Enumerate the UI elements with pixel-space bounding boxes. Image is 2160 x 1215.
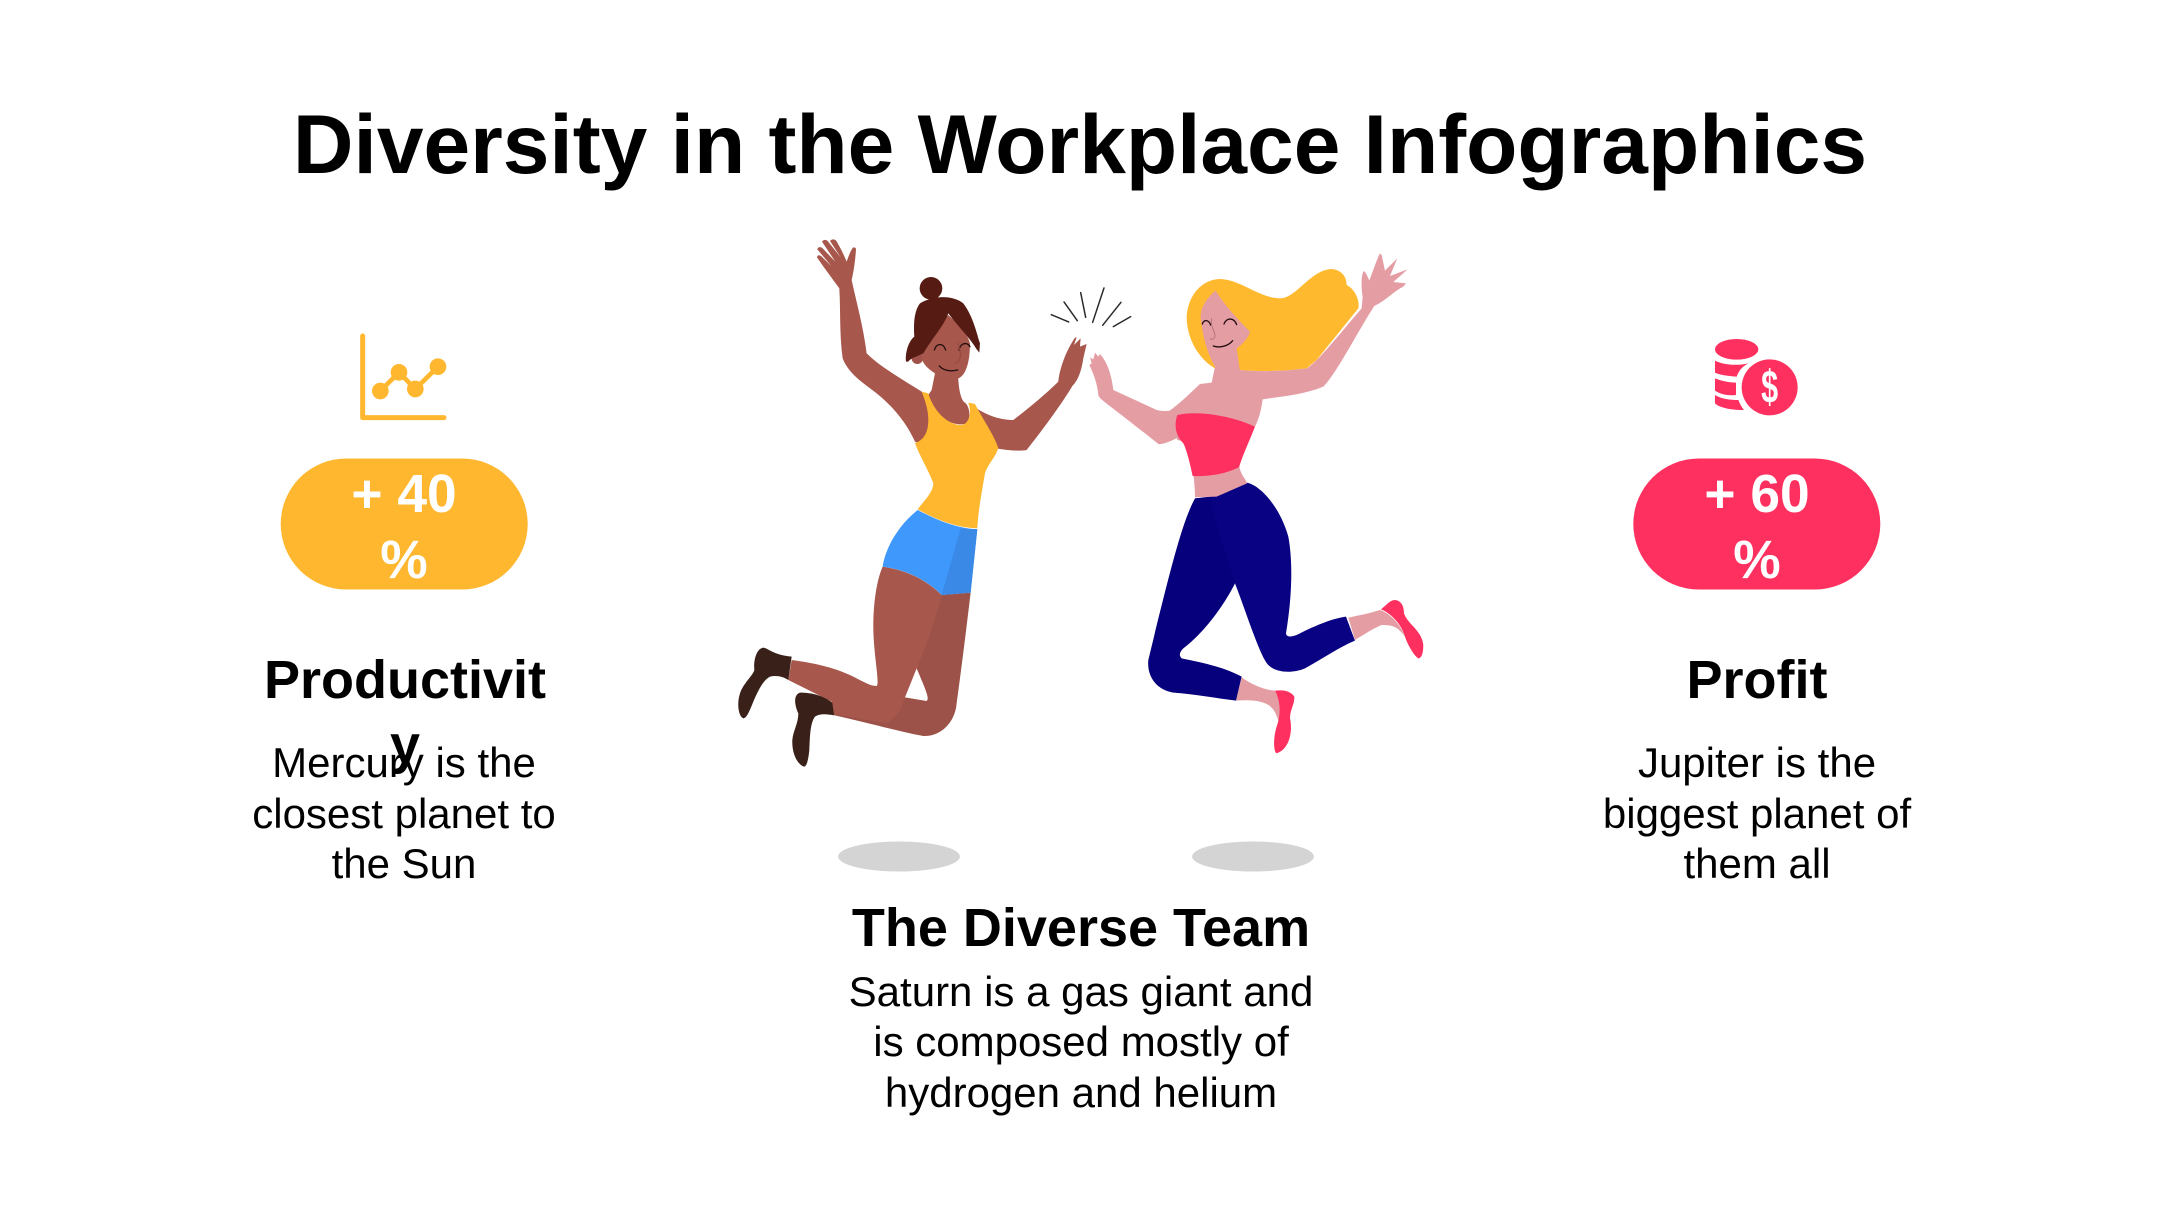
icon: coins: $ (1761, 361, 1778, 413)
badge: +40%: + 40 (351, 465, 457, 524)
heading: the diverse team: The Diverse Team (852, 898, 1310, 958)
panel: profit (1603, 339, 1911, 887)
badge: +60% (1633, 458, 1880, 590)
icon: coins (1715, 339, 1798, 415)
text: mercury (252, 739, 556, 887)
shadow: left figure (838, 842, 960, 872)
icon: line chart (363, 336, 446, 418)
heading: productivity: Productivit (264, 650, 546, 710)
title: Diversity in the Workplace Infographics (293, 97, 1867, 191)
text: saturn: is composed mostly of (873, 1018, 1289, 1065)
icon: clap lines (1051, 288, 1131, 327)
text: jupiter: them all (1683, 840, 1831, 887)
badge: +40%: % (380, 531, 428, 590)
text: saturn (849, 968, 1313, 1116)
text: jupiter: biggest planet of (1603, 790, 1911, 837)
badge: +60%: + 60 (1704, 465, 1810, 524)
figure: back leg and front leg with boots (738, 567, 971, 767)
badge: +40% (281, 458, 528, 590)
illustration: brown-skinned woman jumping (738, 239, 1087, 767)
figure: legs with jeans and shoes (1148, 483, 1423, 753)
illustration: blonde woman jumping (1089, 253, 1423, 753)
text: mercury: closest planet to (252, 790, 556, 837)
text: jupiter: Jupiter is the (1638, 739, 1876, 786)
text: mercury: Mercury is the (272, 739, 536, 786)
text: saturn: hydrogen and helium (885, 1069, 1277, 1116)
text: mercury: the Sun (332, 840, 476, 887)
text: jupiter (1603, 739, 1911, 887)
heading: productivity (264, 650, 546, 775)
panel: productivity (252, 336, 556, 887)
figure: upper body and hair (1089, 253, 1408, 497)
shadow: right figure (1192, 842, 1314, 872)
heading: productivity: y (390, 715, 420, 775)
badge: +60%: % (1733, 531, 1781, 590)
heading: profit: Profit (1686, 650, 1828, 710)
figure: upper body (817, 239, 1087, 595)
text: saturn: Saturn is a gas giant and (849, 968, 1313, 1015)
